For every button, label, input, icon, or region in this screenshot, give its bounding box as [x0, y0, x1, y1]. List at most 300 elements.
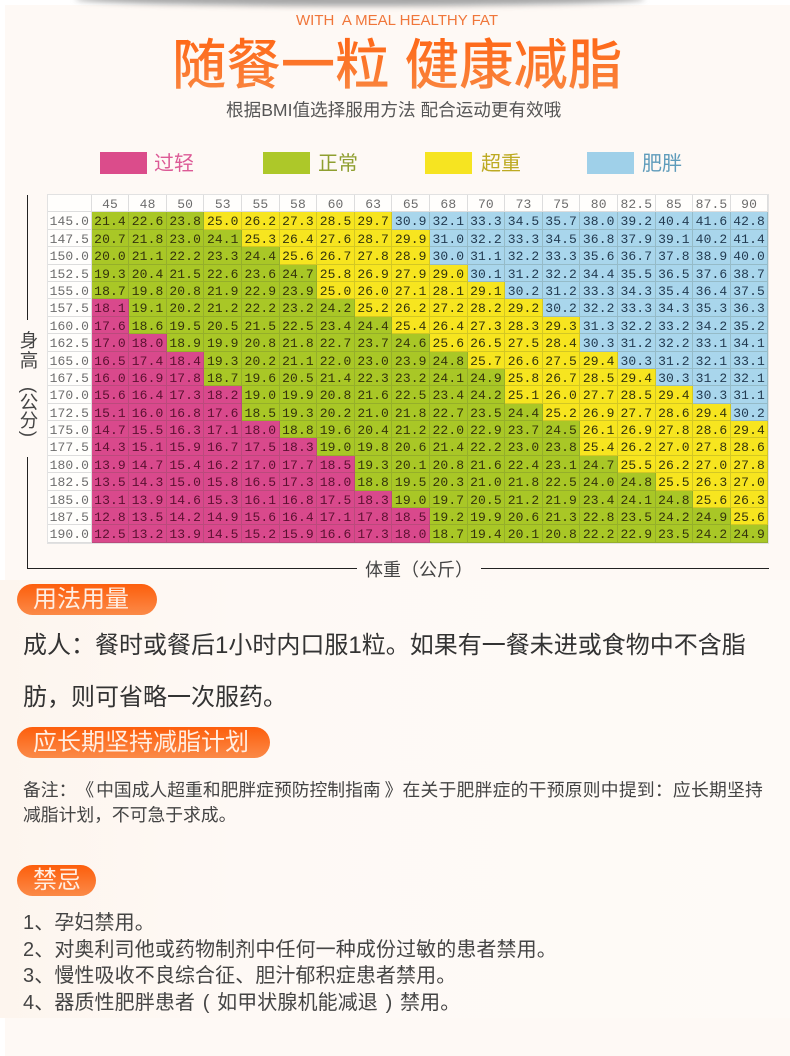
- BMI table chart: 20.0: [94, 249, 126, 264]
- BMI table chart: 24.6: [395, 336, 427, 351]
- BMI table chart: 25.8: [320, 267, 351, 282]
- contraindications list: 4、器质性肥胖患者 ( 如甲状腺机能减退 ) 禁用。: [23, 992, 460, 1014]
- BMI table chart: 18.3: [282, 440, 314, 455]
- BMI table chart: 25.3: [245, 232, 276, 247]
- BMI table chart: 28.5: [620, 388, 652, 403]
- BMI table chart: 36.5: [658, 267, 690, 282]
- BMI table chart: 19.8: [132, 284, 163, 299]
- BMI table chart: 26.2: [395, 301, 427, 316]
- BMI table chart: 14.5: [207, 527, 239, 542]
- BMI table chart: 26.9: [357, 267, 389, 282]
- legend swatch: normal: [263, 152, 310, 174]
- BMI table chart: 29.4: [696, 406, 727, 421]
- BMI table chart: 24.8: [620, 475, 652, 490]
- BMI table chart: 17.6: [207, 406, 239, 421]
- BMI table chart: 15.4: [169, 458, 201, 473]
- BMI table chart: 87.5: [696, 197, 727, 212]
- BMI table chart: 38.0: [583, 214, 614, 229]
- BMI table chart: 15.6: [94, 388, 126, 403]
- BMI table chart: 26.2: [245, 214, 276, 229]
- BMI table chart: 26.7: [320, 249, 351, 264]
- BMI table chart: 29.3: [545, 319, 577, 334]
- BMI table chart: 30.3: [620, 354, 652, 369]
- BMI table chart: 40.0: [733, 249, 765, 264]
- BMI table chart: 18.5: [245, 406, 276, 421]
- BMI table chart: 18.7: [207, 371, 239, 386]
- BMI table chart: 23.9: [395, 354, 427, 369]
- BMI table chart: 13.5: [132, 510, 163, 525]
- BMI table chart: 19.9: [207, 336, 239, 351]
- BMI table chart: 26.2: [658, 458, 690, 473]
- BMI table chart: 28.5: [583, 371, 614, 386]
- BMI table chart: 30.2: [508, 284, 539, 299]
- BMI table chart: 21.9: [207, 284, 239, 299]
- BMI table chart: 30.3: [583, 336, 614, 351]
- BMI table chart: 31.2: [658, 354, 690, 369]
- BMI table chart: 31.1: [470, 249, 502, 264]
- BMI table chart: 31.2: [696, 371, 727, 386]
- BMI table chart: 21.2: [508, 493, 539, 508]
- BMI table chart: 35.4: [658, 284, 690, 299]
- BMI table chart: 42.8: [733, 214, 765, 229]
- BMI table chart: 27.3: [470, 319, 502, 334]
- x axis line right: [481, 568, 769, 569]
- BMI table chart: 22.0: [433, 423, 464, 438]
- heading pill: long-term plan: 应长期坚持减脂计划: [33, 729, 249, 756]
- BMI table chart: 23.7: [357, 336, 389, 351]
- BMI table chart: 30.1: [470, 267, 502, 282]
- BMI table chart: 17.0: [245, 458, 276, 473]
- contraindications list: 2、对奥利司他或药物制剂中任何一种成份过敏的患者禁用。: [23, 939, 557, 961]
- BMI table chart: 23.8: [545, 440, 577, 455]
- BMI table chart: 33.3: [470, 214, 502, 229]
- BMI table chart: 26.7: [545, 371, 577, 386]
- BMI table chart: 27.3: [282, 214, 314, 229]
- title: 随餐一粒 健康减脂: [172, 35, 622, 96]
- BMI table chart: 33.1: [696, 336, 727, 351]
- lower section background: [0, 580, 790, 1018]
- BMI table chart: 35.2: [733, 319, 765, 334]
- BMI table chart: 27.8: [733, 458, 765, 473]
- BMI table chart: 21.8: [395, 406, 427, 421]
- BMI table chart: 21.2: [395, 423, 427, 438]
- BMI table chart: 31.2: [620, 336, 652, 351]
- BMI table chart: 24.7: [583, 458, 614, 473]
- BMI table chart: 13.9: [94, 458, 126, 473]
- BMI table chart: 30.2: [545, 301, 577, 316]
- BMI table chart: 17.3: [282, 475, 314, 490]
- BMI table chart: 24.9: [733, 527, 765, 542]
- BMI table chart: 16.9: [132, 371, 163, 386]
- BMI table chart: 31.1: [733, 388, 765, 403]
- BMI table chart: 23.7: [508, 423, 539, 438]
- y axis label: (: [19, 387, 40, 393]
- BMI table chart: 19.6: [320, 423, 351, 438]
- BMI table chart: 27.5: [508, 336, 539, 351]
- BMI table chart: 31.3: [583, 319, 614, 334]
- y axis label: 公: [20, 392, 38, 413]
- BMI table chart: 37.5: [733, 284, 765, 299]
- BMI table chart: 20.2: [169, 301, 201, 316]
- BMI table chart: 21.6: [357, 388, 389, 403]
- legend label: underweight: 过轻: [154, 153, 194, 175]
- BMI table chart: 18.0: [320, 475, 351, 490]
- BMI table chart: 187.5: [50, 510, 89, 525]
- BMI table chart: 157.5: [50, 301, 89, 316]
- BMI table chart: 18.0: [395, 527, 427, 542]
- BMI table chart: 17.6: [94, 319, 126, 334]
- y axis label: ): [19, 431, 40, 437]
- BMI table chart: 30.9: [395, 214, 427, 229]
- BMI table chart: 21.5: [169, 267, 201, 282]
- BMI table chart: 26.3: [733, 493, 765, 508]
- BMI table chart: 28.6: [696, 423, 727, 438]
- BMI table chart: 24.1: [433, 371, 464, 386]
- BMI table chart: 19.6: [245, 371, 276, 386]
- BMI table chart: 190.0: [50, 527, 89, 542]
- BMI table chart: 24.9: [696, 510, 727, 525]
- BMI table chart: 28.5: [320, 214, 351, 229]
- BMI table chart: 16.3: [169, 423, 201, 438]
- BMI table chart: 22.2: [583, 527, 614, 542]
- BMI table chart: 35.5: [620, 267, 652, 282]
- BMI table chart: 22.8: [583, 510, 614, 525]
- BMI table chart: 18.5: [395, 510, 427, 525]
- BMI table chart: 29.4: [733, 423, 765, 438]
- BMI table chart: 14.3: [132, 475, 163, 490]
- BMI table chart: 70: [478, 197, 494, 212]
- BMI table chart: 38.9: [696, 249, 727, 264]
- BMI table chart: 22.9: [245, 284, 276, 299]
- BMI table chart: 18.0: [132, 336, 163, 351]
- BMI table chart: 175.0: [50, 423, 89, 438]
- BMI table chart: 55: [252, 197, 268, 212]
- BMI table chart: 82.5: [620, 197, 652, 212]
- BMI table chart: 23.3: [207, 249, 239, 264]
- legend swatch: obese: [587, 152, 634, 174]
- BMI table chart: 28.6: [658, 406, 690, 421]
- BMI table chart: 31.2: [508, 267, 539, 282]
- BMI table chart: 73: [516, 197, 531, 212]
- BMI table chart: 25.1: [508, 388, 539, 403]
- BMI table chart: 30.3: [658, 371, 690, 386]
- BMI table chart: 18.9: [169, 336, 201, 351]
- BMI table chart: 25.4: [395, 319, 427, 334]
- BMI table chart: 182.5: [50, 475, 89, 490]
- BMI table chart: 25.2: [545, 406, 577, 421]
- BMI table chart: 32.2: [620, 319, 652, 334]
- BMI table chart: 41.4: [733, 232, 765, 247]
- subtitle: 根据BMI值选择服用方法 配合运动更有效哦: [226, 100, 561, 120]
- BMI table chart: 34.5: [508, 214, 539, 229]
- BMI table chart: 30.0: [433, 249, 464, 264]
- BMI table chart: 26.4: [433, 319, 464, 334]
- BMI table chart: 29.7: [357, 214, 389, 229]
- BMI table chart: 60: [328, 197, 343, 212]
- BMI table chart: 20.8: [169, 284, 201, 299]
- BMI table chart: 15.8: [207, 475, 239, 490]
- BMI table chart: 147.5: [50, 232, 89, 247]
- BMI table chart: 32.2: [508, 249, 539, 264]
- BMI table chart: 21.4: [94, 214, 126, 229]
- BMI table chart: 29.2: [508, 301, 539, 316]
- BMI table chart: 21.4: [433, 440, 464, 455]
- BMI table chart: 20.5: [282, 371, 314, 386]
- BMI table chart: 38.7: [733, 267, 765, 282]
- BMI table chart: 13.9: [169, 527, 201, 542]
- BMI table chart: 26.0: [545, 388, 577, 403]
- BMI table chart: 15.1: [132, 440, 163, 455]
- x axis line left: [27, 568, 357, 569]
- BMI table chart: 33.2: [658, 319, 690, 334]
- BMI table chart: 13.9: [132, 493, 163, 508]
- BMI table chart: 37.6: [696, 267, 727, 282]
- BMI table chart: 63: [365, 197, 381, 212]
- BMI table chart: 36.3: [733, 301, 765, 316]
- BMI table chart: 17.1: [320, 510, 351, 525]
- BMI table chart: 24.8: [658, 493, 690, 508]
- note text: [23, 780, 763, 825]
- BMI table chart: 12.5: [94, 527, 126, 542]
- BMI table chart: 19.9: [282, 388, 314, 403]
- BMI table chart: 27.1: [395, 284, 427, 299]
- BMI table chart: 26.6: [508, 354, 539, 369]
- top shadow: [75, 0, 645, 6]
- BMI table chart: 17.5: [320, 493, 351, 508]
- BMI table chart: 20.2: [245, 354, 276, 369]
- y axis label: 身: [20, 330, 38, 351]
- BMI table chart: 21.3: [545, 510, 577, 525]
- BMI table chart: 33.3: [620, 301, 652, 316]
- BMI table chart: 25.7: [470, 354, 502, 369]
- BMI table chart: 68: [440, 197, 456, 212]
- BMI table chart: 172.5: [50, 406, 89, 421]
- BMI table chart: 23.9: [282, 284, 314, 299]
- heading pill: dosage: [17, 584, 157, 615]
- dosage text line 2: 肪，则可省略一次服药。: [23, 684, 287, 711]
- BMI table chart: 26.2: [620, 440, 652, 455]
- BMI table chart: 23.1: [545, 458, 577, 473]
- BMI table chart: 23.6: [245, 267, 276, 282]
- BMI table chart: 29.9: [395, 232, 427, 247]
- BMI table chart: 24.2: [320, 301, 351, 316]
- BMI table chart: 23.2: [282, 301, 314, 316]
- BMI table chart: 19.5: [169, 319, 201, 334]
- BMI table chart: 35.7: [545, 214, 577, 229]
- BMI table chart: 16.5: [245, 475, 276, 490]
- BMI table chart: 26.0: [357, 284, 389, 299]
- heading pill: contraindications: [17, 865, 96, 896]
- BMI table chart: 20.1: [395, 458, 427, 473]
- legend: [100, 152, 682, 175]
- BMI table chart: 33.1: [733, 354, 765, 369]
- BMI table chart: 21.8: [132, 232, 163, 247]
- BMI table chart: 18.4: [169, 354, 201, 369]
- BMI table chart: 24.1: [207, 232, 239, 247]
- BMI table chart: 180.0: [50, 458, 89, 473]
- BMI table chart: 18.8: [357, 475, 389, 490]
- BMI table chart: 23.5: [620, 510, 652, 525]
- BMI table chart: 18.8: [282, 423, 314, 438]
- BMI table chart: 80: [591, 197, 607, 212]
- BMI table chart: 25.0: [207, 214, 239, 229]
- BMI table chart: 48: [140, 197, 155, 212]
- BMI table chart: 25.8: [508, 371, 539, 386]
- heading pill: contraindications: 禁忌: [33, 867, 81, 894]
- BMI table chart: 21.9: [545, 493, 577, 508]
- BMI table chart: 27.8: [696, 440, 727, 455]
- BMI table chart: 33.3: [583, 284, 614, 299]
- BMI table chart: 21.8: [508, 475, 539, 490]
- BMI table chart: 28.2: [470, 301, 502, 316]
- BMI table chart: 30.3: [696, 388, 727, 403]
- BMI table chart: 20.1: [508, 527, 539, 542]
- BMI table chart: 32.1: [696, 354, 727, 369]
- BMI table chart: 14.2: [169, 510, 201, 525]
- BMI table chart: 17.3: [357, 527, 389, 542]
- BMI table chart: 24.2: [658, 510, 690, 525]
- BMI table chart: 17.1: [207, 423, 239, 438]
- BMI table chart: 27.0: [658, 440, 690, 455]
- BMI table chart: 17.8: [357, 510, 389, 525]
- y axis line upper: [27, 195, 28, 320]
- BMI table chart: 19.9: [470, 510, 502, 525]
- BMI table chart: 23.4: [583, 493, 614, 508]
- BMI table chart: 34.3: [620, 284, 652, 299]
- BMI table chart: 19.5: [395, 475, 427, 490]
- BMI table chart: 25.6: [696, 493, 727, 508]
- BMI table chart: 17.7: [282, 458, 314, 473]
- BMI table chart: 36.4: [696, 284, 727, 299]
- BMI table chart: 31.0: [433, 232, 464, 247]
- BMI table chart: 39.2: [620, 214, 652, 229]
- BMI table chart: 155.0: [50, 284, 89, 299]
- BMI table chart: 18.0: [245, 423, 276, 438]
- y axis line lower: [27, 457, 28, 569]
- BMI table chart: 16.4: [282, 510, 314, 525]
- BMI table chart: 27.2: [433, 301, 464, 316]
- BMI table chart: 29.0: [433, 267, 464, 282]
- BMI table chart: 29.4: [658, 388, 690, 403]
- BMI table chart: 40.4: [658, 214, 690, 229]
- BMI table chart: 24.8: [433, 354, 464, 369]
- BMI table chart: 12.8: [94, 510, 126, 525]
- BMI table chart: 15.2: [245, 527, 276, 542]
- BMI table chart: 15.1: [94, 406, 126, 421]
- BMI table chart: 18.2: [207, 388, 239, 403]
- contraindications list: 3、慢性吸收不良综合征、胆汁郁积症患者禁用。: [23, 965, 456, 987]
- y axis label: 分: [20, 410, 38, 431]
- BMI table chart: 21.0: [357, 406, 389, 421]
- BMI table chart: 37.9: [620, 232, 652, 247]
- BMI table chart: 18.3: [357, 493, 389, 508]
- BMI table chart: 20.2: [320, 406, 351, 421]
- BMI table chart: 24.9: [470, 371, 502, 386]
- BMI table chart: 25.6: [282, 249, 314, 264]
- BMI table chart: 36.8: [583, 232, 614, 247]
- BMI table chart: 29.4: [620, 371, 652, 386]
- BMI table chart: 20.8: [433, 458, 464, 473]
- BMI table chart: 26.4: [282, 232, 314, 247]
- BMI table chart: 27.8: [357, 249, 389, 264]
- dosage text: 成人：餐时或餐后1小时内口服1粒。如果有一餐未进或食物中不含脂: [23, 632, 746, 659]
- BMI table chart: 23.8: [169, 214, 201, 229]
- BMI table chart: 22.0: [320, 354, 351, 369]
- BMI table chart: 17.3: [169, 388, 201, 403]
- BMI table chart: 170.0: [50, 388, 89, 403]
- BMI table chart: 25.6: [433, 336, 464, 351]
- BMI table chart: 150.0: [50, 249, 89, 264]
- BMI table chart: 22.6: [132, 214, 163, 229]
- BMI table chart: 27.5: [545, 354, 577, 369]
- BMI table chart: 14.3: [94, 440, 126, 455]
- BMI table chart: 32.2: [545, 267, 577, 282]
- BMI table chart: 19.0: [245, 388, 276, 403]
- BMI table chart: 27.9: [395, 267, 427, 282]
- BMI table chart: 18.1: [94, 301, 126, 316]
- BMI table chart: 16.0: [132, 406, 163, 421]
- BMI table chart: 19.0: [320, 440, 351, 455]
- x axis label: 体重（公斤）: [365, 560, 473, 580]
- BMI table chart: 20.8: [545, 527, 577, 542]
- BMI table chart: 23.5: [470, 406, 502, 421]
- BMI table chart: 24.7: [282, 267, 314, 282]
- BMI table chart: 39.1: [658, 232, 690, 247]
- BMI table chart: 20.8: [245, 336, 276, 351]
- BMI table chart: 25.6: [733, 510, 765, 525]
- BMI table chart: 33.3: [545, 249, 577, 264]
- BMI table chart: 22.2: [470, 440, 502, 455]
- BMI table chart: 19.3: [282, 406, 314, 421]
- BMI table chart: 160.0: [50, 319, 89, 334]
- BMI table chart: 30.2: [733, 406, 765, 421]
- BMI table chart: 31.2: [545, 284, 577, 299]
- BMI table chart: 17.5: [245, 440, 276, 455]
- BMI table chart: 15.0: [169, 475, 201, 490]
- BMI table chart: 23.4: [320, 319, 351, 334]
- BMI table chart: 177.5: [50, 440, 89, 455]
- BMI table chart: 23.5: [658, 527, 690, 542]
- BMI table chart: 19.3: [207, 354, 239, 369]
- BMI table chart: 21.5: [245, 319, 276, 334]
- BMI table chart: 24.4: [508, 406, 539, 421]
- note text: 减脂计划，不可急于求成。: [23, 805, 236, 825]
- BMI table chart: 14.7: [94, 423, 126, 438]
- BMI table chart: 16.4: [132, 388, 163, 403]
- BMI table chart: 13.1: [94, 493, 126, 508]
- BMI table chart: 25.4: [583, 440, 614, 455]
- BMI table chart: 24.2: [696, 527, 727, 542]
- BMI table chart: 23.4: [433, 388, 464, 403]
- BMI table chart: 29.1: [470, 284, 502, 299]
- BMI table chart: 20.7: [94, 232, 126, 247]
- BMI table chart: 35.3: [696, 301, 727, 316]
- BMI table chart: 18.7: [94, 284, 126, 299]
- BMI table chart: 22.2: [245, 301, 276, 316]
- BMI table chart: 37.8: [658, 249, 690, 264]
- BMI table chart: 34.2: [696, 319, 727, 334]
- y axis label: 高: [20, 350, 38, 371]
- BMI table chart: 14.6: [169, 493, 201, 508]
- BMI table chart: 35.6: [583, 249, 614, 264]
- BMI table chart: 14.9: [207, 510, 239, 525]
- BMI table chart: 185.0: [50, 493, 89, 508]
- BMI table chart: 16.5: [94, 354, 126, 369]
- BMI table chart: 25.0: [320, 284, 351, 299]
- BMI table chart: 22.4: [508, 458, 539, 473]
- BMI table chart: 19.1: [132, 301, 163, 316]
- BMI table chart: 28.3: [508, 319, 539, 334]
